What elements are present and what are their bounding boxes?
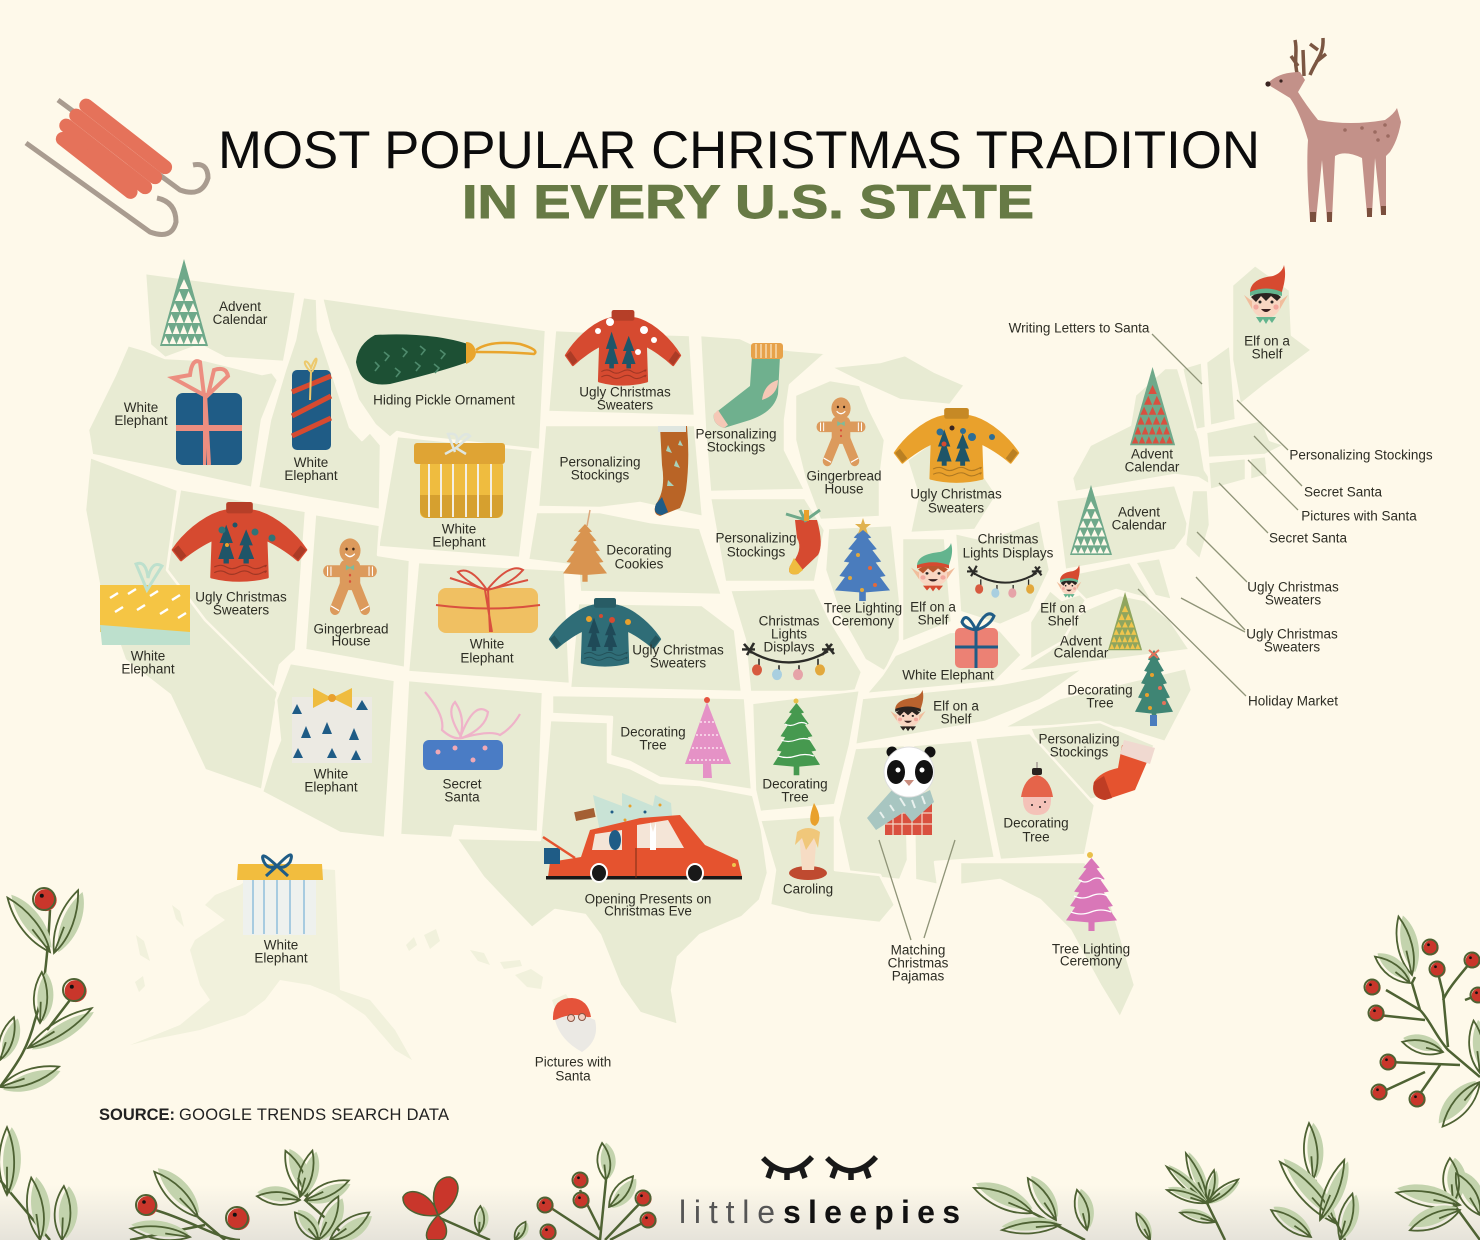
icon: yellow gift CA	[100, 563, 190, 645]
label NV: Ugly Christmas	[195, 590, 287, 604]
icon: advent tree VA	[1108, 592, 1142, 650]
label MO: Displays	[763, 640, 815, 654]
icon: pink tree OK	[685, 697, 731, 778]
label NC: Decorating	[1067, 682, 1133, 698]
logo: littlesleepies: little	[679, 1194, 775, 1230]
label NM: Secret	[442, 776, 482, 792]
label MN: Stockings	[707, 440, 766, 454]
icon: cookie tree ornament NE	[563, 510, 607, 582]
foliage: right branch	[1364, 914, 1480, 1132]
icon: brown stocking SD	[655, 426, 688, 516]
label AL/MS: Matching	[891, 942, 945, 958]
title: MOST POPULAR CHRISTMAS TRADITION	[218, 121, 1260, 180]
icon: pink gift KY	[955, 614, 998, 668]
label ID: Elephant	[284, 468, 338, 483]
label DC: Holiday Market	[1248, 694, 1338, 708]
label AK: Elephant	[254, 950, 308, 966]
label PA: Advent	[1118, 504, 1160, 520]
label HI: Pictures with	[535, 1054, 611, 1070]
label WY: White	[442, 522, 476, 536]
icon: advent tree PA	[1070, 485, 1112, 555]
label NJ: Ugly Christmas	[1247, 580, 1339, 594]
icon: white elephant gift AZ	[292, 688, 372, 763]
label NJ: Sweaters	[1265, 592, 1321, 608]
label ND: Sweaters	[597, 398, 653, 412]
bottom fade band	[0, 1185, 1480, 1240]
label AZ: White	[314, 766, 348, 782]
label WA: Advent	[219, 299, 261, 314]
label AK: White	[264, 938, 298, 952]
label CO: White	[470, 636, 504, 652]
label NH: Personalizing Stockings	[1289, 448, 1433, 462]
label NV: Sweaters	[213, 602, 269, 618]
label MO: Christmas	[759, 614, 820, 628]
icon: pink tree FL	[1066, 852, 1117, 931]
label SC: Personalizing	[1038, 732, 1120, 746]
icon: lights OH	[967, 566, 1042, 598]
label SD: Stockings	[571, 468, 630, 482]
source note: SOURCE:	[99, 1106, 175, 1124]
label RI: Pictures with Santa	[1301, 508, 1417, 524]
foliage: top-left branch	[0, 887, 98, 1099]
icon: lights MO	[742, 643, 834, 680]
icon: gingerbread UT	[328, 538, 372, 611]
label AR: Decorating	[762, 776, 828, 792]
label NY: Calendar	[1125, 460, 1180, 474]
label ME: Elf on a	[1244, 334, 1290, 348]
label OH: Lights Displays	[963, 546, 1054, 560]
label MO: Lights	[771, 626, 807, 642]
label KS: Sweaters	[650, 656, 706, 670]
icon: blue gift OR	[173, 361, 242, 465]
icon: orange stocking SC	[1093, 740, 1155, 800]
label UT: House	[331, 634, 371, 648]
label IL: Ceremony	[832, 614, 894, 628]
icon: big red sweater NV	[173, 502, 306, 581]
label WI: House	[824, 482, 864, 496]
label CA: White	[131, 648, 165, 664]
icon: blue tree IL	[835, 518, 890, 601]
label IL: Tree Lighting	[824, 600, 902, 616]
icon: teal sweater KS	[550, 598, 660, 666]
label OR: White	[124, 400, 158, 415]
label IA: Stockings	[727, 544, 786, 560]
icon: red sweater ND	[566, 310, 680, 385]
label OK: Decorating	[620, 724, 686, 740]
foliage: bottom-right	[971, 1122, 1480, 1240]
icon: elf WV	[1057, 565, 1081, 598]
label WV: Shelf	[1048, 614, 1079, 628]
label UT: Gingerbread	[313, 622, 389, 636]
icon: red stocking IA	[786, 510, 821, 574]
label FL: Ceremony	[1060, 954, 1122, 968]
icon: tan gift CO	[436, 568, 540, 633]
leader lines	[879, 334, 1302, 940]
icon: candle LA	[789, 803, 827, 880]
icon: elf TN	[890, 690, 926, 731]
label GA: Tree	[1022, 830, 1050, 844]
icon: pickle ornament MT	[356, 334, 535, 385]
icon: elf ME	[1244, 265, 1288, 324]
foliage: flower and berries	[403, 1142, 657, 1240]
label WV: Elf on a	[1040, 600, 1086, 616]
label SC: Stockings	[1050, 744, 1109, 760]
label AL/MS: Pajamas	[892, 968, 945, 984]
foliage: bottom-left	[0, 1127, 377, 1240]
label NE: Cookies	[615, 556, 664, 572]
label CA: Elephant	[121, 662, 175, 676]
icon: reindeer	[1265, 38, 1401, 222]
label WI: Gingerbread	[806, 468, 882, 484]
label IN: Shelf	[918, 612, 949, 628]
icon: advent tree WA	[160, 259, 208, 346]
logo: littlesleepies	[679, 1157, 960, 1230]
label ND: Ugly Christmas	[579, 384, 671, 400]
label ME: Shelf	[1252, 346, 1283, 362]
label PA: Calendar	[1112, 518, 1167, 532]
title	[218, 121, 1260, 228]
label TX: Opening Presents on	[585, 892, 711, 906]
icon: advent tree NY	[1130, 367, 1175, 445]
label MA: Secret Santa	[1304, 484, 1383, 500]
label VT: Writing Letters to Santa	[1009, 320, 1150, 336]
label TN: Shelf	[941, 712, 972, 726]
label CT: Secret Santa	[1269, 530, 1348, 546]
label NM: Santa	[444, 790, 480, 804]
label NC: Tree	[1086, 696, 1114, 710]
label AZ: Elephant	[304, 780, 358, 794]
label SD: Personalizing	[559, 454, 641, 470]
map: Alaska	[130, 865, 412, 1060]
icon: elf IN	[911, 543, 955, 591]
label TX: Christmas Eve	[604, 904, 692, 918]
title: IN EVERY U.S. STATE	[462, 175, 1034, 228]
label DE and MD: Sweaters	[1264, 640, 1320, 654]
label OK: Tree	[639, 738, 667, 752]
logo: littlesleepies: sleepies	[783, 1194, 960, 1230]
label AR: Tree	[781, 790, 809, 804]
label VA: Calendar	[1054, 646, 1109, 660]
label CO: Elephant	[460, 650, 514, 666]
label TN: Elf on a	[933, 698, 979, 714]
label MI: Ugly Christmas	[910, 486, 1002, 502]
icon: yellow sweater MI	[895, 408, 1018, 482]
label WA: Calendar	[213, 312, 268, 327]
label KY: White Elephant	[902, 668, 994, 682]
label IA: Personalizing	[715, 530, 797, 546]
icon: ornament GA	[1021, 762, 1053, 815]
label NY: Advent	[1131, 446, 1173, 462]
label NE: Decorating	[606, 542, 672, 558]
label WY: Elephant	[432, 534, 486, 550]
label VA: Advent	[1060, 634, 1102, 648]
icon: blue gift NM	[423, 692, 520, 770]
map: Hawaii	[406, 929, 578, 1044]
map: contiguous U.S. states	[85, 265, 1312, 1025]
label GA: Decorating	[1003, 816, 1069, 830]
label DE and MD: Ugly Christmas	[1246, 626, 1338, 642]
label HI: Santa	[555, 1068, 591, 1084]
label MN: Personalizing	[695, 426, 777, 442]
icon: yellow gift WY	[414, 434, 505, 518]
label OH: Christmas	[978, 532, 1039, 546]
icon: green tree AR	[773, 698, 820, 775]
label AL/MS: Christmas	[888, 956, 949, 970]
source note: GOOGLE TRENDS SEARCH DATA	[179, 1106, 449, 1124]
label MT: Hiding Pickle Ornament	[373, 392, 515, 408]
icon: gingerbread WI	[821, 397, 861, 462]
label FL: Tree Lighting	[1052, 942, 1130, 956]
label IN: Elf on a	[910, 600, 956, 614]
icon: red car TX	[543, 793, 742, 882]
icon: striped gift AK	[237, 855, 323, 935]
label ID: White	[294, 455, 328, 470]
label KS: Ugly Christmas	[632, 642, 724, 658]
icon: decorated tree NC	[1135, 650, 1173, 726]
label OR: Elephant	[114, 413, 168, 428]
icon: green stocking MN	[714, 343, 783, 428]
label MI: Sweaters	[928, 500, 984, 516]
icon: Santa HI	[553, 998, 596, 1052]
icon: tall striped gift ID	[292, 359, 331, 450]
label LA: Caroling	[783, 882, 833, 896]
icon: panda AL	[867, 746, 936, 835]
icon: sled	[26, 96, 208, 234]
